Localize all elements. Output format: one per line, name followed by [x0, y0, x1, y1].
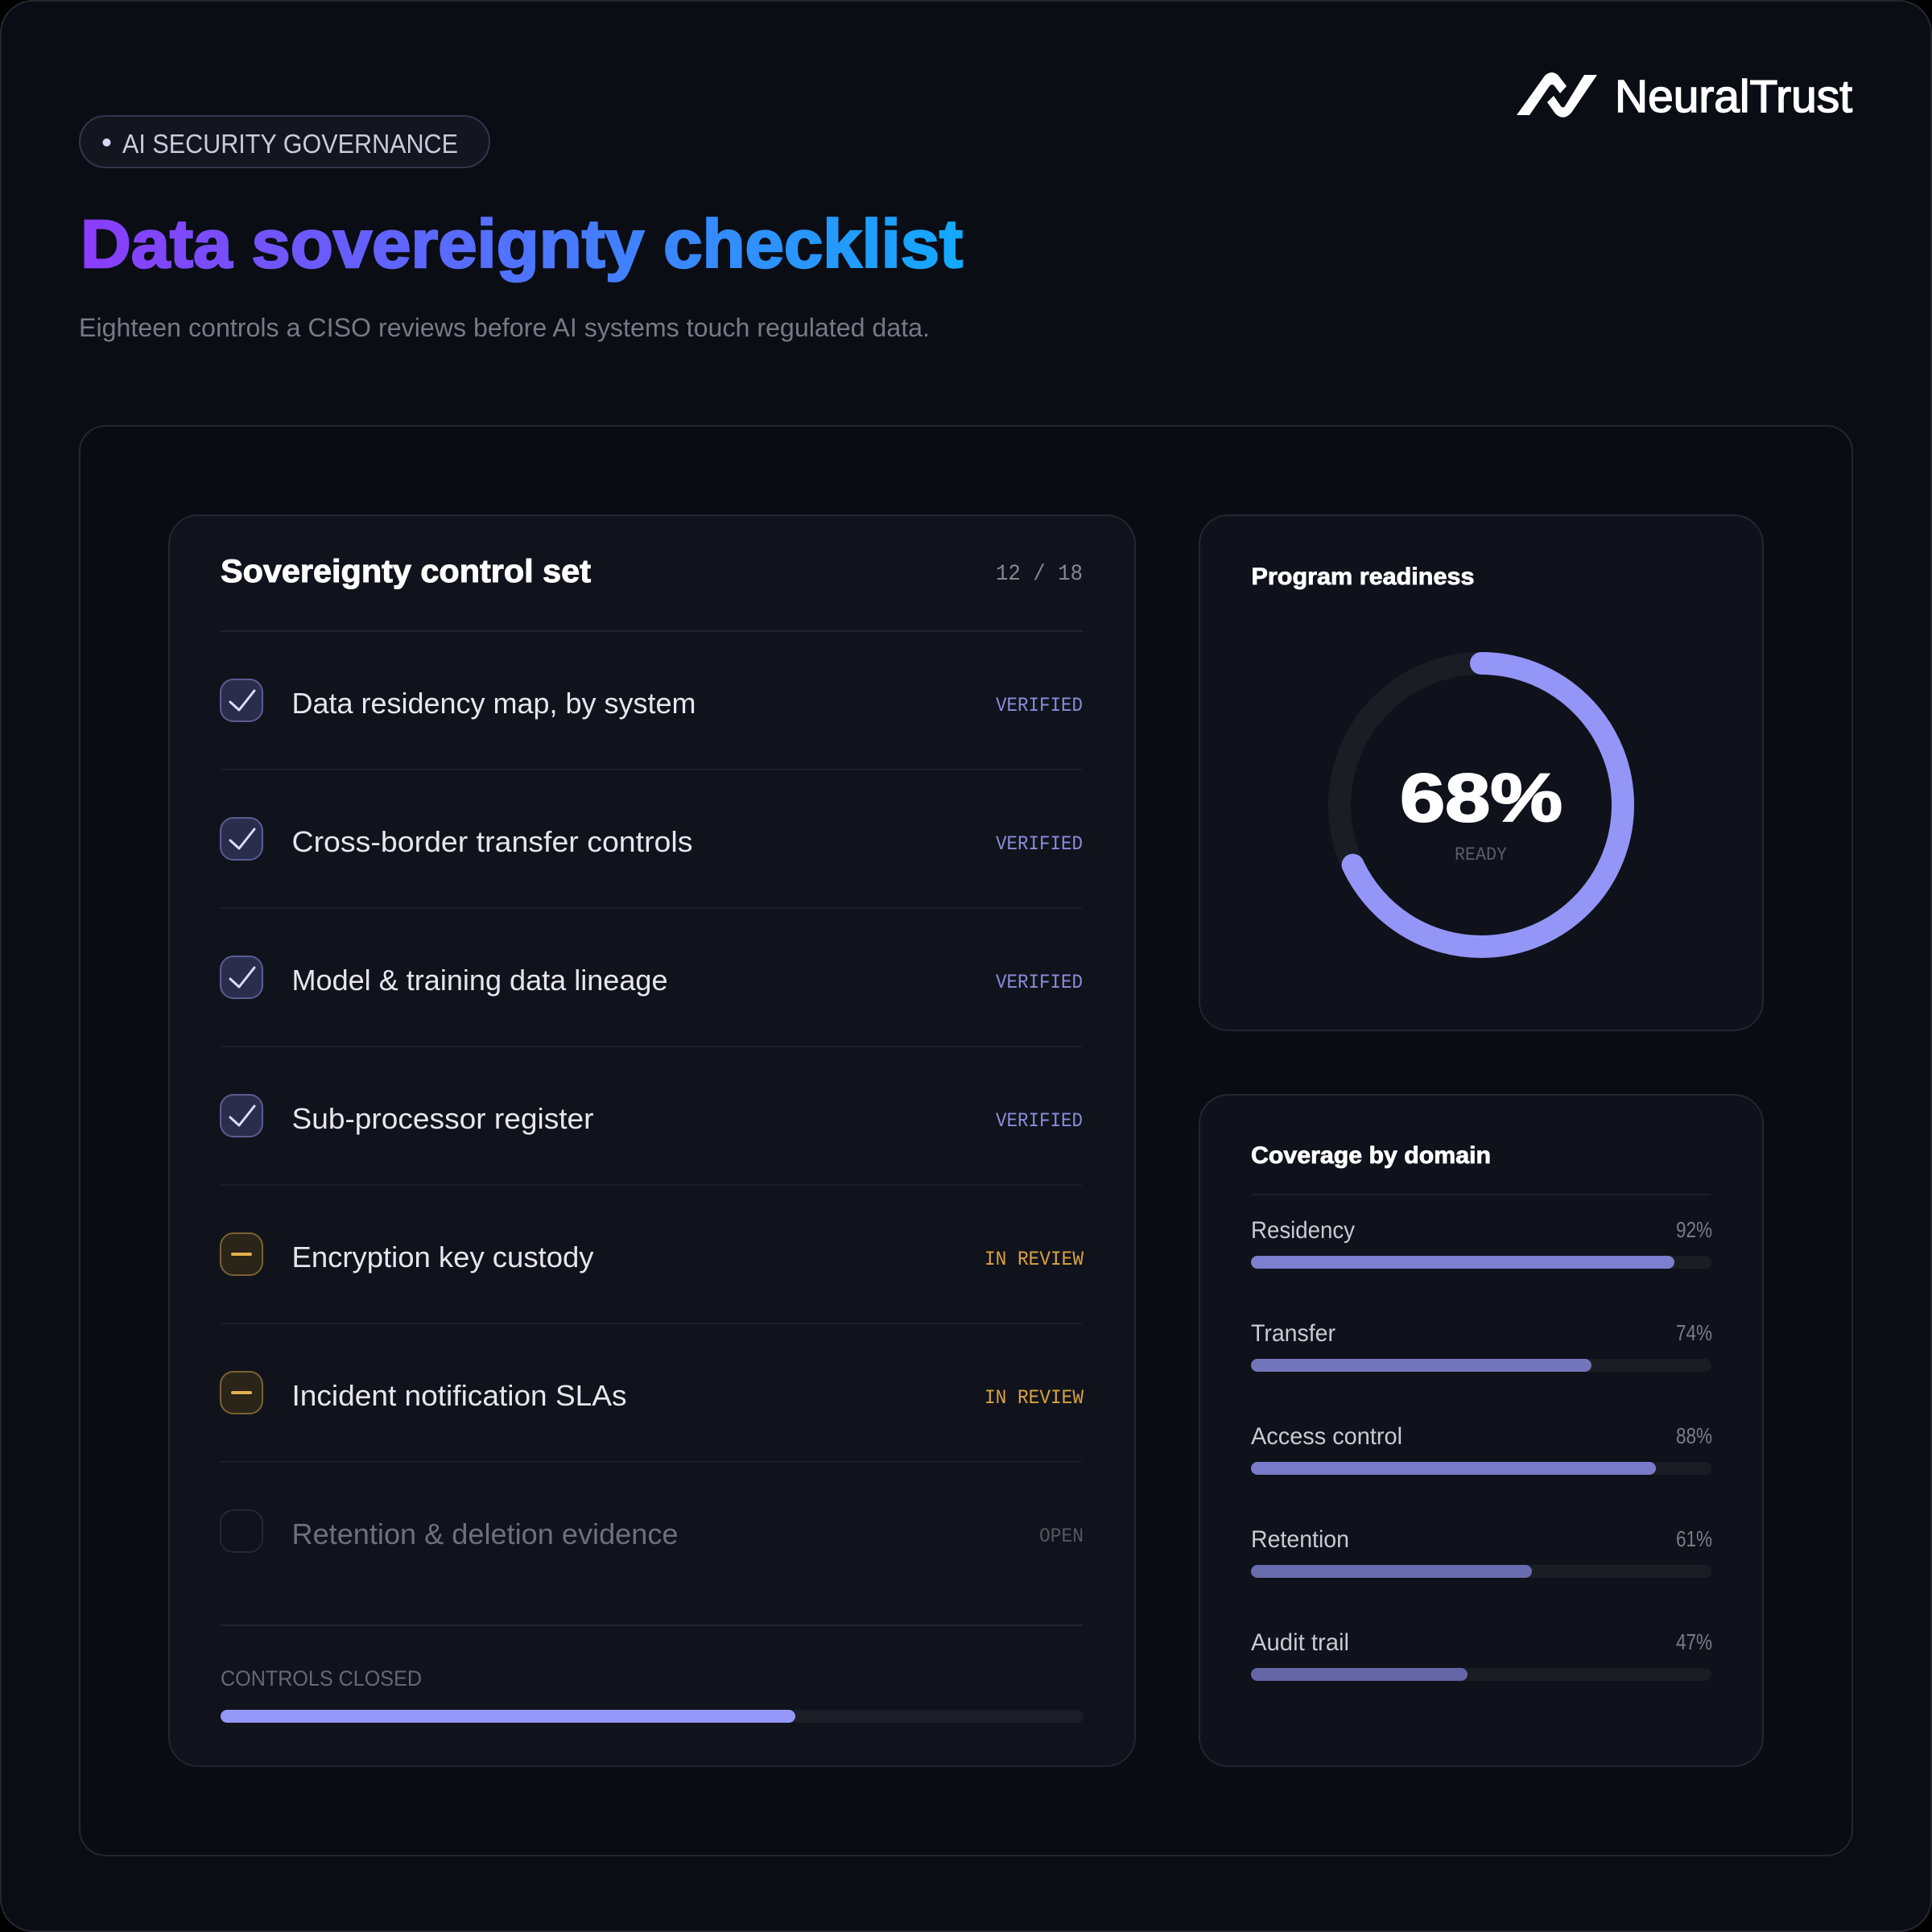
bar: transfer: 74% [1676, 1320, 1712, 1345]
row: encryption key custody: IN REVIEW [985, 1248, 1084, 1271]
title: Data sovereignty checklist [80, 206, 963, 282]
icon: empty box [221, 1510, 262, 1552]
row: retention and deletion evidence: OPEN [1039, 1525, 1084, 1548]
row: encryption key custody: Encryption key custody [291, 1241, 594, 1274]
heading: Program readiness [1251, 564, 1475, 590]
bar: access control [1251, 1423, 1712, 1475]
bar: retention: Retention [1251, 1526, 1349, 1553]
row: sub-processor register: Sub-processor register [291, 1102, 594, 1135]
row: retention and deletion evidence [221, 1510, 1084, 1552]
icon: checked box [221, 679, 262, 721]
row: cross-border transfer controls [221, 818, 1083, 860]
row: incident notification SLAs [221, 1372, 1084, 1414]
icon: in-review box [221, 1233, 262, 1275]
icon: checked box [221, 818, 262, 860]
icon: NeuralTrust mark [1517, 72, 1597, 118]
row: cross-border transfer controls: VERIFIED [996, 832, 1083, 856]
bar: audit trail [1251, 1629, 1712, 1681]
row: cross-border transfer controls: Cross-border transfer controls [291, 825, 692, 858]
bar: retention: 61% [1676, 1526, 1712, 1551]
bar: access control: 88% [1676, 1423, 1712, 1448]
row: data residency map [221, 679, 1083, 721]
bar: audit trail: Audit trail [1251, 1629, 1349, 1656]
bar: audit trail: 47% [1676, 1629, 1712, 1654]
panel: outer card [80, 426, 1852, 1856]
counter: 12 / 18 [996, 562, 1083, 587]
bar: access control: Access control [1251, 1423, 1402, 1450]
controls closed progress: CONTROLS CLOSED [221, 1666, 422, 1690]
wordmark: NeuralTrust [1615, 71, 1852, 122]
heading: Coverage by domain [1251, 1142, 1491, 1169]
row: incident notification SLAs: Incident notification SLAs [291, 1379, 626, 1412]
bar: transfer: Transfer [1251, 1320, 1335, 1347]
row: model and training data lineage: VERIFIED [996, 971, 1083, 994]
row: incident notification SLAs: IN REVIEW [985, 1386, 1084, 1410]
icon: checked box [221, 956, 262, 998]
controls closed progress [221, 1666, 1084, 1723]
panel: coverage by domain [1199, 1095, 1763, 1766]
brand logo [1517, 71, 1852, 122]
bar: residency [1251, 1217, 1712, 1269]
panel: program readiness [1199, 515, 1763, 1030]
row: sub-processor register: VERIFIED [996, 1109, 1083, 1133]
bar: transfer [1251, 1320, 1712, 1372]
row: encryption key custody [221, 1233, 1084, 1275]
bar: residency: Residency [1251, 1217, 1355, 1244]
row: model and training data lineage: Model & training data lineage [291, 964, 668, 997]
row: sub-processor register [221, 1095, 1083, 1137]
row: model and training data lineage [221, 956, 1083, 998]
heading: Sovereignty control set [221, 554, 591, 589]
donut chart: READY [1455, 844, 1507, 865]
bar: residency: 92% [1676, 1217, 1712, 1242]
row: data residency map: VERIFIED [996, 694, 1083, 717]
panel: sovereignty control set [169, 515, 1135, 1766]
icon: checked box [221, 1095, 262, 1137]
subtitle: Eighteen controls a CISO reviews before AI systems touch regulated data. [79, 313, 930, 342]
donut chart: 68% [1400, 760, 1563, 836]
donut chart [1340, 663, 1623, 947]
tag pill: AI SECURITY GOVERNANCE [122, 129, 458, 159]
row: data residency map: Data residency map, by system [291, 687, 696, 720]
row: retention and deletion evidence: Retention & deletion evidence [291, 1517, 678, 1550]
tag pill [80, 116, 489, 167]
bar: retention [1251, 1526, 1712, 1578]
icon: in-review box [221, 1372, 262, 1414]
